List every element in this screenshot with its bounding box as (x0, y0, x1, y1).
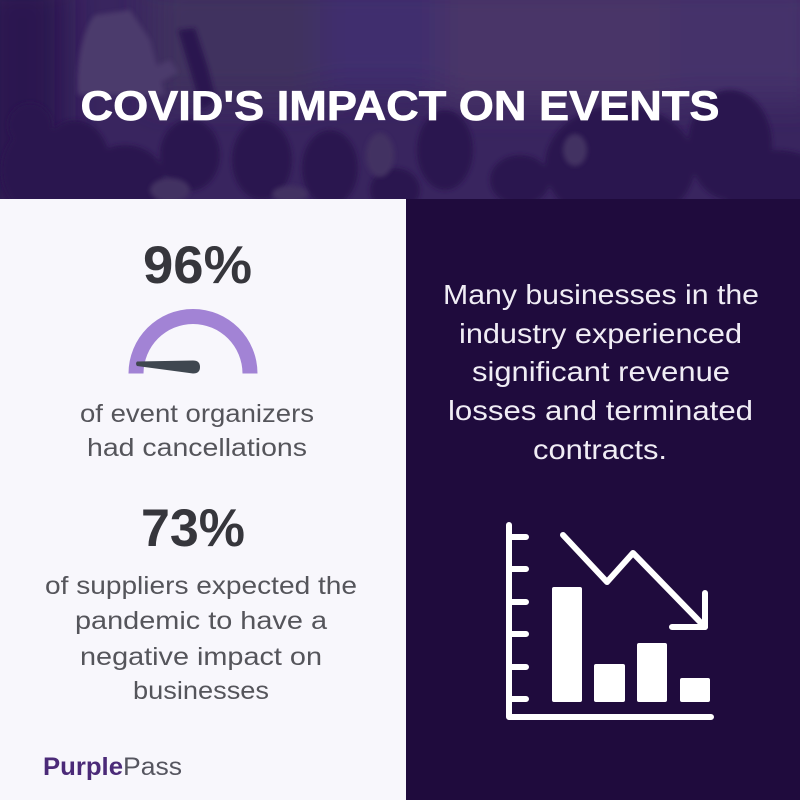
text: revenue losses statement (443, 279, 759, 465)
text: revenue losses statement: contracts. (533, 434, 667, 465)
text: revenue losses statement: industry experienced (459, 318, 742, 349)
text: suppliers: negative impact on (80, 643, 322, 671)
text: revenue losses statement: significant revenue (472, 356, 730, 387)
text: suppliers: businesses (133, 677, 269, 705)
title: COVID'S IMPACT ON EVENTS (80, 82, 719, 129)
panel: header photo banner (0, 0, 800, 199)
logo: PurplePass: PurplePass (43, 753, 182, 781)
icon: gauge (128, 309, 258, 374)
text: event organizers (80, 400, 314, 462)
stat: 96%: 96% (143, 236, 252, 295)
text: suppliers: pandemic to have a (75, 607, 327, 635)
text: revenue losses statement: Many businesses in the (443, 279, 759, 310)
stat: 73%: 73% (141, 499, 245, 558)
panel: revenue losses (right) (406, 199, 800, 800)
text: revenue losses statement: losses and terminated (448, 395, 753, 426)
panel: statistics (left) (0, 199, 406, 800)
text: event organizers: of event organizers (80, 400, 314, 428)
text: suppliers (45, 572, 357, 705)
icon: declining bar chart (509, 525, 711, 717)
text: suppliers: of suppliers expected the (45, 572, 357, 600)
text: event organizers: had cancellations (87, 434, 307, 462)
